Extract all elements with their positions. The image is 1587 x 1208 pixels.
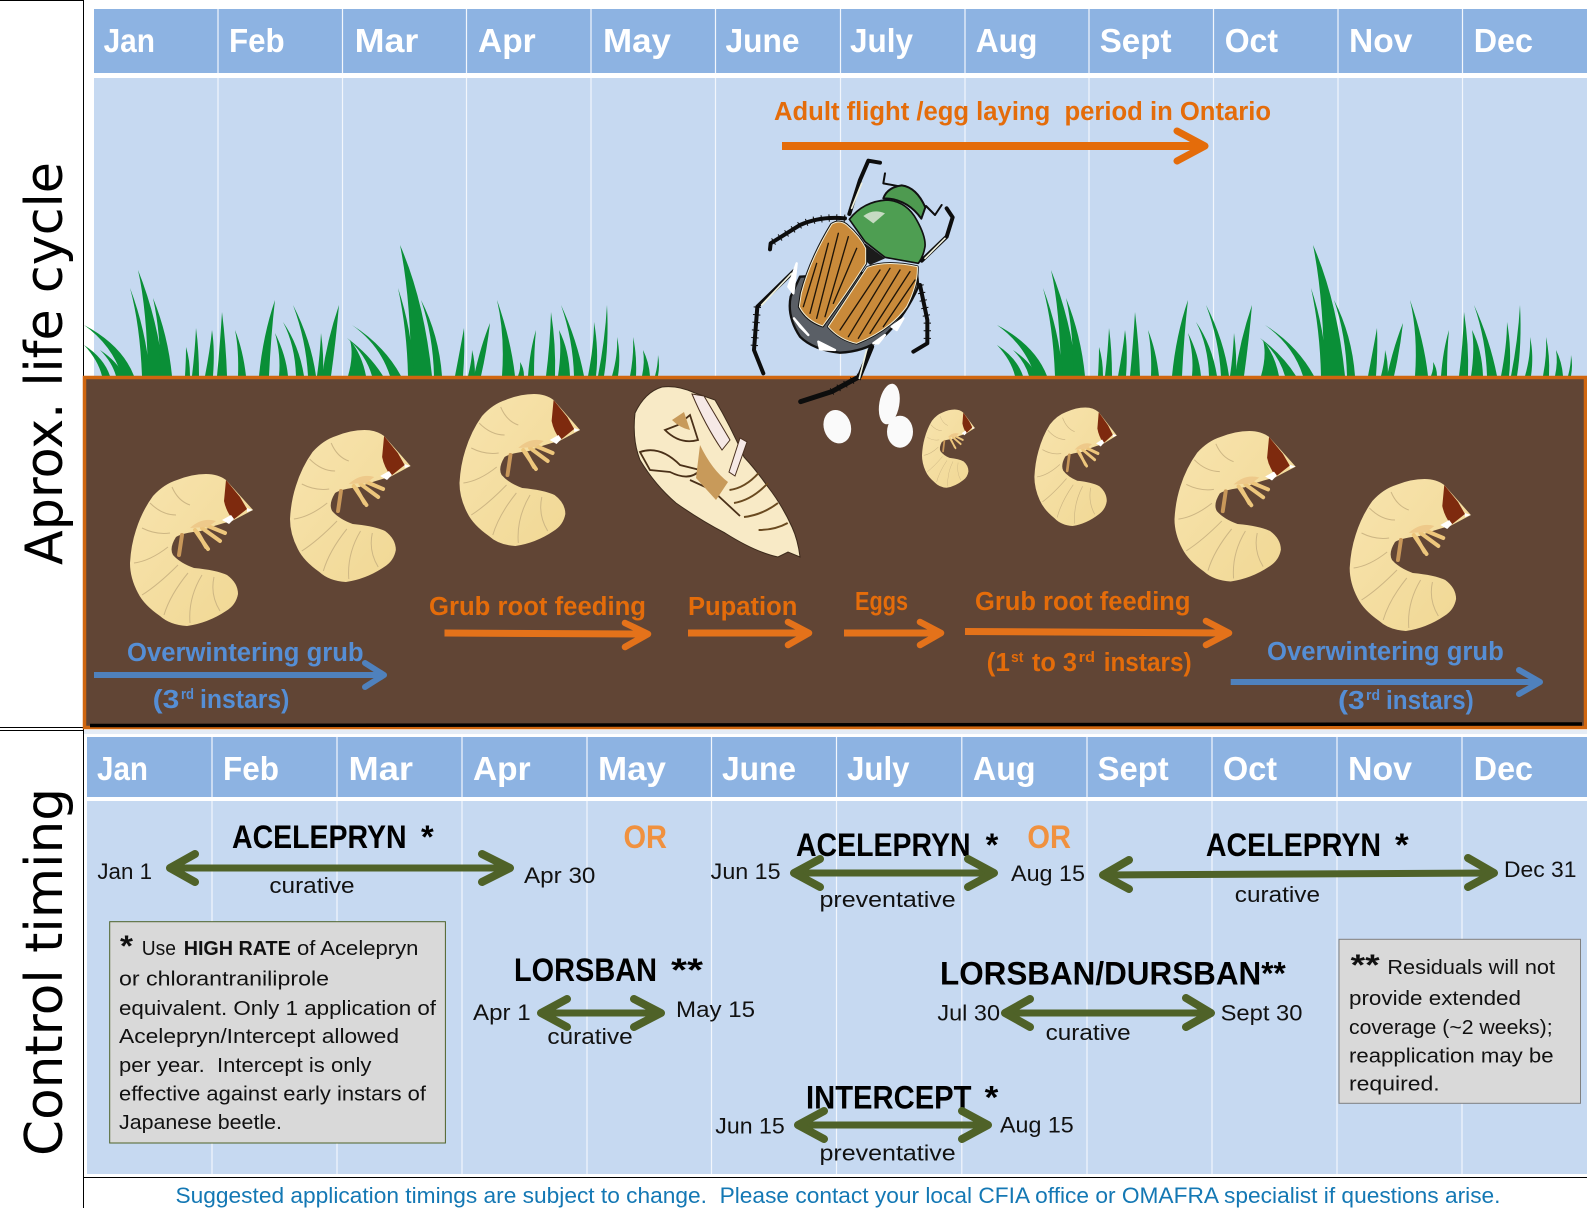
month header top bbox=[94, 9, 1587, 376]
treatment: lorsban dursban curative: curative bbox=[1046, 1020, 1131, 1045]
month header top: July bbox=[850, 22, 914, 59]
icon: japanese beetle bbox=[754, 161, 953, 402]
sky background bbox=[94, 78, 1587, 378]
icon: pupa bbox=[634, 387, 800, 557]
label: 3rd instars right: rd bbox=[1366, 687, 1380, 704]
icon: grub 4 small bbox=[922, 410, 975, 488]
treatment: intercept preventative bbox=[715, 1079, 1074, 1166]
label: 1st to 3rd instars: st bbox=[1011, 649, 1023, 666]
treatment: lorsban curative apr-may: LORSBAN bbox=[514, 952, 657, 988]
treatment: intercept preventative: Jun 15 bbox=[715, 1113, 785, 1138]
arrow: adult flight bbox=[782, 131, 1205, 161]
label: pupation: Pupation bbox=[688, 593, 797, 621]
label: 3rd instars left: rd bbox=[181, 686, 194, 703]
month header bottom: Oct bbox=[1223, 750, 1277, 787]
treatment: acelepryn preventative: ACELEPRYN bbox=[796, 827, 970, 863]
treatment: acelepryn curative jan-apr: curative bbox=[269, 873, 355, 898]
footer note: Suggested application timings are subject to change. Please contact your local CFIA office or OMAFRA specialist if questions arise. bbox=[176, 1183, 1500, 1208]
footer rule bbox=[84, 1176, 1587, 1178]
note: asterisk box: effective against early instars of bbox=[119, 1083, 426, 1106]
treatment: acelepryn curative jan-apr: * bbox=[421, 819, 434, 855]
label: 1st to 3rd instars: rd bbox=[1079, 649, 1095, 666]
treatment: acelepryn preventative bbox=[711, 827, 1085, 912]
life cycle side title: Aprox. life cycle bbox=[15, 162, 75, 565]
note: asterisk box: Use bbox=[142, 937, 176, 960]
treatment: lorsban curative apr-may: ** bbox=[671, 952, 704, 988]
month header bottom: June bbox=[722, 750, 796, 787]
treatment: lorsban curative apr-may: Apr 1 bbox=[473, 1000, 531, 1025]
note: asterisk box: of Acelepryn bbox=[297, 937, 418, 960]
note: double asterisk box: provide extended bbox=[1349, 987, 1521, 1010]
label: 1st to 3rd instars bbox=[987, 649, 1192, 677]
treatment: lorsban dursban curative bbox=[937, 955, 1302, 1045]
icon: grub 2 bbox=[290, 430, 411, 582]
panel: control timing bbox=[15, 737, 1587, 1174]
treatment: acelepryn preventative: preventative bbox=[820, 887, 956, 912]
month header bottom: Apr bbox=[473, 750, 531, 787]
treatment: intercept preventative: preventative bbox=[820, 1141, 956, 1166]
month header bottom: May bbox=[598, 750, 667, 787]
icon: grub 5 bbox=[1034, 407, 1117, 526]
month header bottom: Mar bbox=[348, 750, 413, 787]
treatment: acelepryn preventative: Jun 15 bbox=[711, 859, 781, 884]
label: 3rd instars left: (3 bbox=[153, 686, 179, 714]
month header top: Feb bbox=[229, 22, 285, 59]
treatment: lorsban dursban curative: LORSBAN/DURSBAN** bbox=[940, 955, 1286, 991]
icon: grub 6 bbox=[1174, 431, 1296, 581]
arrow: overwintering right bbox=[1231, 670, 1540, 694]
treatment: acelepryn curative jan-apr: ACELEPRYN bbox=[232, 819, 407, 855]
label: grub root feeding 1: Grub root feeding bbox=[429, 593, 646, 621]
treatment: intercept preventative: Aug 15 bbox=[1000, 1113, 1074, 1138]
grass right bbox=[997, 245, 1572, 376]
grass left bbox=[84, 245, 659, 376]
treatment: acelepryn curative jan-apr bbox=[97, 819, 595, 898]
treatment: acelepryn curative aug-dec: Dec 31 bbox=[1504, 857, 1576, 882]
note: asterisk box: HIGH RATE bbox=[184, 937, 291, 960]
arrow: pupation bbox=[688, 622, 809, 645]
treatment: lorsban curative apr-may: curative bbox=[547, 1024, 633, 1049]
label: 3rd instars right bbox=[1338, 687, 1474, 715]
arrow: overwintering left bbox=[94, 663, 384, 687]
note: asterisk box: Acelepryn/Intercept allowed bbox=[119, 1025, 399, 1048]
treatment: intercept preventative: * bbox=[985, 1079, 999, 1115]
note: double asterisk box: required. bbox=[1349, 1073, 1440, 1096]
label: grub root feeding 2: Grub root feeding bbox=[975, 588, 1190, 616]
treatment: intercept preventative: INTERCEPT bbox=[806, 1079, 972, 1115]
note: double asterisk box bbox=[1339, 939, 1580, 1103]
treatment: lorsban dursban curative: Sept 30 bbox=[1221, 1001, 1302, 1026]
or label 2: OR bbox=[1027, 819, 1071, 855]
icon: eggs bbox=[819, 382, 913, 448]
icon: grub 1 bbox=[130, 474, 253, 626]
note: asterisk box: * bbox=[120, 930, 133, 963]
note: double asterisk box: coverage (~2 weeks); bbox=[1349, 1016, 1553, 1039]
treatment: acelepryn preventative: Aug 15 bbox=[1011, 861, 1085, 886]
month header bottom: Aug bbox=[973, 750, 1036, 787]
arrow: eggs bbox=[844, 622, 941, 645]
label: 3rd instars right: (3 bbox=[1338, 687, 1365, 715]
treatment: lorsban dursban curative: Jul 30 bbox=[937, 1001, 1000, 1026]
note: double asterisk box: ** bbox=[1351, 949, 1380, 982]
treatment: acelepryn curative jan-apr: Apr 30 bbox=[524, 863, 595, 888]
arrow: grub root feeding 1 bbox=[444, 623, 648, 647]
month header bottom: Dec bbox=[1474, 750, 1533, 787]
month header top: Mar bbox=[355, 22, 419, 59]
note: asterisk box: equivalent. Only 1 application of bbox=[119, 997, 436, 1020]
label: eggs: Eggs bbox=[855, 588, 908, 616]
note: asterisk box: or chlorantraniliprole bbox=[119, 968, 329, 991]
treatment: acelepryn curative aug-dec: curative bbox=[1235, 882, 1320, 907]
icon: grub 7 bbox=[1350, 479, 1471, 631]
month header bottom: Feb bbox=[223, 750, 279, 787]
month header top: May bbox=[603, 22, 672, 59]
month header top: Jan bbox=[104, 22, 155, 59]
treatment: acelepryn preventative: * bbox=[986, 827, 999, 863]
treatment: acelepryn curative aug-dec: * bbox=[1395, 827, 1409, 863]
treatment: acelepryn curative aug-dec bbox=[1103, 827, 1576, 907]
month header top: Nov bbox=[1349, 22, 1413, 59]
treatment: lorsban curative apr-may bbox=[473, 952, 755, 1049]
or label 1: OR bbox=[624, 819, 667, 855]
month header top: Oct bbox=[1225, 22, 1278, 59]
label: 1st to 3rd instars: (1 bbox=[987, 649, 1010, 677]
month header bottom: July bbox=[847, 750, 910, 787]
treatment: lorsban curative apr-may: May 15 bbox=[676, 997, 755, 1022]
left side rule and top rule bbox=[0, 0, 84, 1208]
month header bottom bbox=[87, 737, 1587, 1174]
adult flight label: Adult flight /egg laying period in Ontario bbox=[774, 98, 1271, 126]
month header top: Aug bbox=[976, 22, 1038, 59]
icon: grub 3 bbox=[460, 394, 580, 546]
month header bottom: Sept bbox=[1098, 750, 1169, 787]
month header top: Sept bbox=[1100, 22, 1172, 59]
label: 3rd instars left bbox=[153, 686, 289, 714]
note: asterisk box bbox=[110, 922, 445, 1143]
note: asterisk box: Japanese beetle. bbox=[119, 1111, 282, 1134]
label: 1st to 3rd instars: instars) bbox=[1104, 649, 1192, 677]
pale strip beneath soil bbox=[84, 730, 1587, 734]
note: double asterisk box: reapplication may be bbox=[1349, 1044, 1554, 1067]
month header bottom: Nov bbox=[1348, 750, 1413, 787]
month header top: Apr bbox=[478, 22, 536, 59]
label: 3rd instars right: instars) bbox=[1386, 687, 1474, 715]
label: 3rd instars left: instars) bbox=[200, 686, 289, 714]
label: overwintering grub right: Overwintering grub bbox=[1267, 638, 1504, 666]
label: overwintering grub left: Overwintering grub bbox=[127, 639, 364, 667]
label: 1st to 3rd instars: to 3 bbox=[1032, 649, 1077, 677]
treatment: acelepryn curative aug-dec: ACELEPRYN bbox=[1206, 827, 1381, 863]
treatment: acelepryn curative jan-apr: Jan 1 bbox=[97, 859, 152, 884]
timing chart background bbox=[87, 801, 1587, 1174]
month header bottom: Jan bbox=[97, 750, 148, 787]
arrow: grub root feeding 2 bbox=[965, 621, 1229, 645]
month header top: June bbox=[726, 22, 800, 59]
month header top: Dec bbox=[1474, 22, 1533, 59]
note: double asterisk box: Residuals will not bbox=[1387, 956, 1555, 979]
soil panel bbox=[84, 378, 1586, 728]
control timing side title: Control timing bbox=[15, 788, 75, 1156]
note: asterisk box: per year. Intercept is only bbox=[119, 1054, 372, 1077]
